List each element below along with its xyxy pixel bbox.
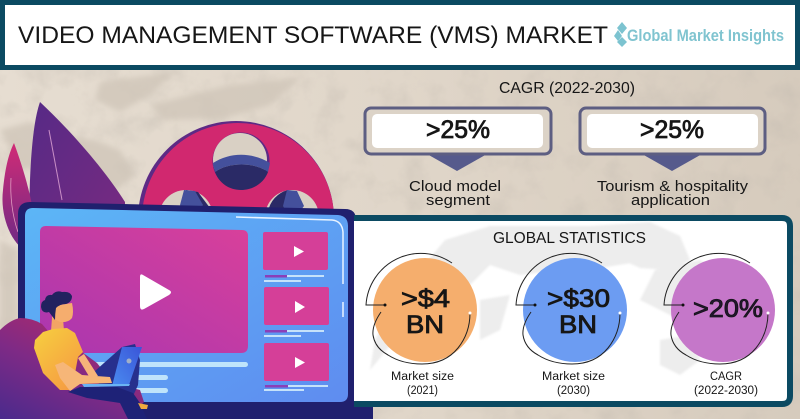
head bbox=[52, 303, 73, 322]
callout: tourism and hospitality: >25% bbox=[640, 116, 704, 144]
main video bbox=[40, 226, 248, 353]
leaves bbox=[2, 102, 125, 260]
main video caption bars bbox=[90, 362, 248, 393]
CAGR heading: CAGR (2022-2030) bbox=[499, 80, 635, 97]
stat: market size 2030: BN bbox=[559, 311, 597, 339]
monitor bbox=[0, 202, 373, 419]
callout: tourism and hospitality: Tourism & hospitality bbox=[597, 178, 749, 195]
back leg bbox=[95, 344, 140, 394]
stat: CAGR: CAGR bbox=[710, 371, 742, 383]
reel side holes bbox=[159, 190, 319, 244]
stat: market size 2030: Market size bbox=[542, 371, 605, 383]
screen bbox=[25, 208, 348, 402]
callout: tourism and hospitality bbox=[580, 108, 765, 209]
beanbag bbox=[0, 318, 144, 419]
thumbnail 3 bbox=[264, 343, 329, 391]
stat: market size 2021: BN bbox=[406, 311, 444, 339]
stat: market size 2021: (2021) bbox=[407, 385, 438, 397]
reel top hole bbox=[212, 132, 270, 190]
torso bbox=[34, 328, 83, 390]
person on beanbag bbox=[0, 291, 148, 419]
stat: market size 2021: Market size bbox=[391, 371, 454, 383]
heading: GLOBAL STATISTICS bbox=[493, 230, 646, 247]
stat: market size 2030 bbox=[516, 253, 627, 397]
callout: tourism and hospitality: application bbox=[631, 192, 710, 209]
film reel bbox=[138, 121, 334, 317]
stat: CAGR: (2022-2030) bbox=[694, 385, 758, 397]
stat: market size 2021: >$4 bbox=[401, 285, 450, 313]
callout: cloud model bbox=[365, 108, 551, 209]
thumbnail 2 bbox=[264, 287, 329, 337]
logo: Global Market Insights bbox=[614, 22, 784, 47]
arm bbox=[55, 362, 112, 391]
callout: cloud model: >25% bbox=[426, 116, 490, 144]
callout: cloud model: Cloud model bbox=[409, 178, 501, 195]
stat: CAGR: >20% bbox=[693, 295, 763, 323]
title: VIDEO MANAGEMENT SOFTWARE (VMS) MARKET bbox=[18, 22, 608, 49]
hair bbox=[41, 291, 72, 320]
stat: market size 2030: >$30 bbox=[547, 285, 610, 313]
stat: market size 2021 bbox=[366, 253, 477, 397]
stat: market size 2030: (2030) bbox=[557, 385, 590, 397]
world map watermark bbox=[370, 222, 730, 375]
front leg bbox=[68, 387, 147, 419]
panel: global statistics bbox=[354, 218, 790, 404]
header band bbox=[0, 0, 800, 70]
shoe bbox=[138, 403, 148, 409]
neck bbox=[51, 318, 64, 331]
callout: cloud model: segment bbox=[426, 192, 491, 209]
laptop bbox=[82, 347, 142, 387]
thumbnail 1 bbox=[263, 232, 328, 282]
stat: CAGR bbox=[664, 253, 775, 397]
